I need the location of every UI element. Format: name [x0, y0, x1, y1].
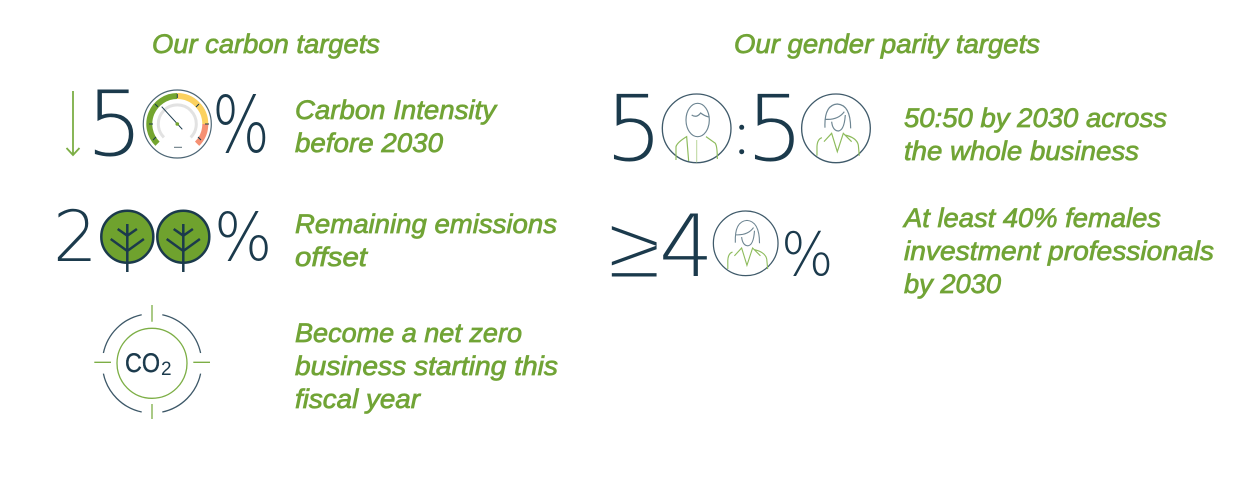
icon: gauge — [143, 90, 211, 158]
stat: at least 40 percent — [607, 197, 833, 298]
number: 4: 4 — [659, 197, 714, 297]
icon: CO2 target: 2 — [161, 359, 172, 380]
heading: our carbon targets: Our carbon targets — [152, 29, 380, 59]
heading: our gender parity targets: Our gender parity targets — [734, 29, 1040, 59]
text: net zero: fiscal year — [295, 384, 421, 414]
text: carbon intensity — [295, 95, 498, 158]
text: net zero: Become a net zero — [295, 318, 522, 348]
text: carbon intensity: Carbon Intensity — [295, 95, 498, 125]
number: greater or equal: ≥ — [607, 197, 661, 298]
text: remaining emissions: offset — [295, 242, 369, 272]
icon: tree — [157, 211, 209, 272]
stat: 50:50 — [605, 77, 870, 182]
icon: woman — [802, 94, 870, 163]
text: net zero — [295, 318, 558, 414]
icon: CO2 target — [94, 305, 210, 419]
number: 2: 2 — [53, 196, 98, 278]
text: at least 40 percent: At least 40% females — [902, 203, 1161, 233]
text: carbon intensity: before 2030 — [295, 128, 443, 158]
panel: gender parity targets — [605, 29, 1214, 299]
icon: CO2 target: CO — [125, 348, 160, 378]
text: net zero: business starting this — [295, 351, 558, 381]
number: percent sign: % — [781, 219, 833, 290]
number: colon — [739, 125, 744, 154]
text: 50:50 by 2030: 50:50 by 2030 across — [904, 103, 1167, 133]
text: at least 40 percent — [902, 203, 1214, 299]
text: 50:50 by 2030 — [904, 103, 1167, 166]
number: percent sign: % — [212, 81, 270, 171]
text: remaining emissions: Remaining emissions — [295, 209, 557, 239]
number: 5: 5 — [746, 77, 804, 182]
text: at least 40 percent: investment professionals — [904, 236, 1214, 266]
icon: man — [662, 94, 731, 163]
icon: woman — [713, 211, 778, 276]
stat: 50 percent down — [66, 72, 270, 177]
number: percent sign: % — [214, 200, 272, 277]
text: 50:50 by 2030: the whole business — [904, 136, 1139, 166]
icon: tree — [101, 211, 153, 272]
text: remaining emissions — [295, 209, 557, 272]
number: 5: 5 — [86, 72, 143, 177]
stat: 200 percent — [53, 196, 272, 278]
number: 5: 5 — [605, 77, 663, 182]
text: at least 40 percent: by 2030 — [904, 269, 1001, 299]
icon: down arrow — [66, 91, 80, 155]
panel: carbon targets — [53, 29, 558, 419]
